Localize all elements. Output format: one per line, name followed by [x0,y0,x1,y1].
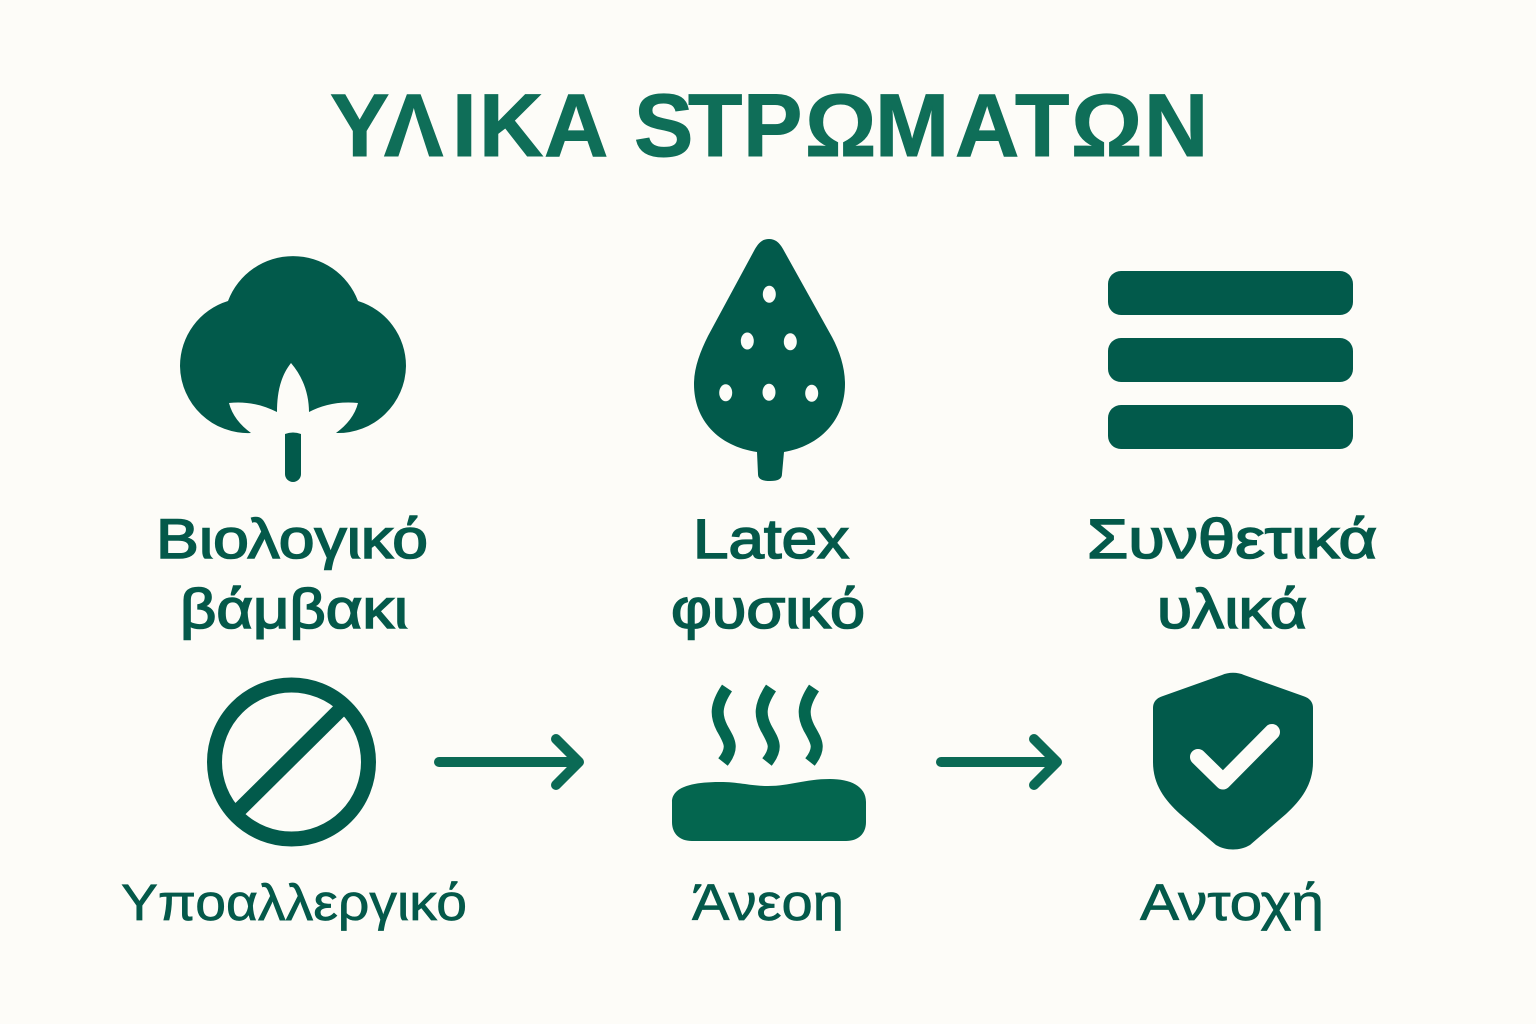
label: breathability: Άνεοη [692,874,844,931]
label: organic cotton [156,507,428,640]
label: natural latex: Latex [693,507,849,570]
arrow: hypoallergenic to breathability [439,739,579,785]
label: organic cotton: Βιολογικό [156,507,428,570]
title: ΥΛΙΚΑ STΡΩΜΑΤΩΝ [330,75,1208,175]
label: synthetic materials [1087,507,1377,640]
label: synthetic materials: υλικά [1157,577,1307,640]
panel: hypoallergenic [121,685,467,931]
icon: stacked layers [1108,271,1353,449]
label: synthetic materials: Συνθετικά [1087,507,1377,570]
panel: natural latex [671,239,865,640]
label: durability: Αντοχή [1140,874,1324,931]
icon: cotton boll [180,256,406,482]
label: hypoallergenic: Υποαλλεργικό [121,874,467,931]
icon: prohibition sign [214,685,368,839]
panel: synthetic materials [1087,271,1377,640]
panel: durability [1140,673,1324,931]
icon: latex tree drop [694,239,845,481]
label: organic cotton: βάμβακι [180,577,408,640]
icon: mattress with heat waves [672,688,866,841]
arrow: breathability to durability [941,739,1057,785]
icon: shield with check [1153,673,1313,850]
label: natural latex [671,507,865,640]
panel: organic cotton [156,256,428,640]
label: natural latex: φυσικό [671,577,865,640]
panel: breathability [672,688,866,931]
